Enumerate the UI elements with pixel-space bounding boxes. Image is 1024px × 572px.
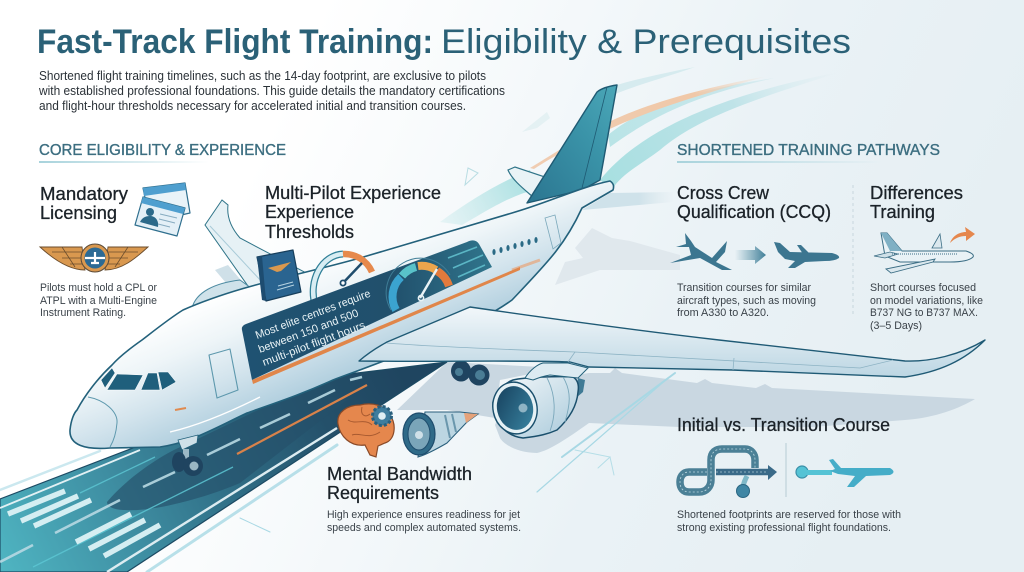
title	[37, 23, 851, 61]
text: differences training: B737 NG to B737 MAX.	[870, 307, 978, 319]
tail fin	[527, 85, 617, 203]
orange runway line	[237, 385, 367, 454]
speed swooshes behind tail	[440, 67, 840, 225]
text: licensing requirement: Instrument Rating.	[40, 307, 126, 319]
icon: pilot wings	[40, 244, 148, 272]
text: ccq	[677, 282, 816, 319]
main wing	[359, 307, 985, 377]
text: initial vs transition	[677, 509, 901, 534]
nose landing gear	[172, 435, 203, 476]
text: ccq: aircraft types, such as moving	[677, 295, 816, 307]
banner text: between 150 and 500	[257, 307, 360, 356]
cockpit windows	[101, 368, 176, 390]
title: Fast-Track Flight Training:	[37, 23, 433, 61]
title: Eligibility & Prerequisites	[441, 23, 851, 61]
heading: mental bandwidth: Requirements	[327, 482, 439, 503]
heading: differences training: Training	[870, 201, 935, 222]
icon: aircraft transition	[670, 233, 839, 270]
heading: multi-pilot experience	[265, 182, 441, 242]
icon: jet engine	[403, 412, 478, 457]
engine intake	[488, 378, 542, 438]
cabin windows	[492, 237, 538, 255]
intro paragraph: and flight-hour thresholds necessary for accelerated initial and transition courses.	[39, 99, 466, 113]
text: differences training: (3–5 Days)	[870, 320, 922, 332]
text: initial vs transition: Shortened footprints are reserved for those with	[677, 509, 901, 521]
aircraft shadow on runway	[107, 390, 347, 510]
banner detail lines	[448, 247, 485, 277]
vertical dashed divider	[852, 185, 854, 317]
far wing	[192, 200, 312, 322]
rear door	[545, 215, 561, 249]
left tailplane	[508, 167, 548, 197]
runway	[0, 362, 447, 572]
text: initial vs transition: strong existing professional flight foundations.	[677, 522, 891, 534]
intro paragraph: Shortened flight training timelines, such as the 14-day footprint, are exclusive to pilots	[39, 69, 486, 83]
wing engine	[488, 363, 588, 438]
orange nose mark	[175, 408, 186, 410]
icon: licence cards	[135, 183, 190, 236]
text: differences training: Short courses focused	[870, 282, 976, 294]
text: differences training: on model variations, like	[870, 295, 983, 307]
ground shadows	[397, 228, 975, 453]
banner text	[254, 288, 372, 369]
threshold bars	[8, 491, 160, 556]
text: ccq: Transition courses for similar	[677, 282, 811, 294]
heading: cross crew qualification: Cross Crew	[677, 182, 770, 203]
right tailplane	[582, 192, 673, 210]
icon: winding road route	[680, 449, 777, 498]
far engine	[192, 280, 262, 322]
icon: brain with gear	[338, 404, 394, 457]
text: differences training	[870, 282, 983, 332]
icon: aircraft with arrow	[874, 227, 975, 273]
banner: multi-pilot flight hours	[242, 240, 520, 384]
heading: mandatory licensing: Licensing	[40, 202, 117, 223]
banner text: multi-pilot flight hours.	[261, 318, 370, 369]
engine pylon	[525, 363, 588, 380]
icon: logbook	[257, 250, 301, 301]
heading: initial vs transition: Initial vs. Transition Course	[677, 414, 890, 435]
icon: direct route plane	[796, 459, 894, 487]
heading: differences training: Differences	[870, 182, 963, 203]
text: licensing requirement: Pilots must hold a CPL or	[40, 282, 157, 294]
banner text: Most elite centres require	[254, 288, 372, 342]
text: licensing requirement: ATPL with a Multi-Engine	[40, 295, 157, 307]
gauge in banner	[386, 247, 485, 310]
divider between icons	[785, 443, 787, 497]
heading: differences training	[870, 182, 963, 222]
heading: mental bandwidth	[327, 463, 472, 503]
heading: cross crew qualification: Qualification (CCQ)	[677, 201, 831, 222]
cyan streaks	[33, 457, 233, 567]
intro paragraph	[38, 69, 505, 113]
nose cone	[88, 397, 117, 447]
heading: multi-pilot experience: Multi-Pilot Experience	[265, 182, 441, 203]
heading: mandatory licensing	[40, 183, 129, 223]
text: licensing requirement	[40, 282, 157, 319]
text: mental bandwidth: speeds and complex automated systems.	[327, 522, 521, 534]
small gauge icon	[313, 254, 372, 305]
runway centre dashes	[0, 377, 362, 562]
section heading: core eligibility: CORE ELIGIBILITY & EXPERIENCE	[39, 142, 286, 159]
heading: mandatory licensing: Mandatory	[40, 183, 129, 204]
front door	[209, 349, 238, 398]
light motion lines on ground	[0, 373, 675, 572]
text: ccq: from A330 to A320.	[677, 307, 769, 319]
heading: multi-pilot experience: Thresholds	[265, 221, 354, 242]
text: mental bandwidth	[327, 509, 521, 534]
text: mental bandwidth: High experience ensures readiness for jet	[327, 509, 520, 521]
section heading: shortened pathways: SHORTENED TRAINING PATHWAYS	[677, 142, 940, 159]
heading: mental bandwidth: Mental Bandwidth	[327, 463, 472, 484]
fuselage	[70, 181, 614, 448]
light triangles	[522, 112, 550, 132]
heading: multi-pilot experience: Experience	[265, 201, 354, 222]
main landing gear	[451, 360, 490, 386]
orange stripe	[252, 267, 520, 384]
intro paragraph: with established professional foundations. This guide details the mandatory certifications	[38, 84, 505, 98]
heading: cross crew qualification	[677, 182, 831, 222]
